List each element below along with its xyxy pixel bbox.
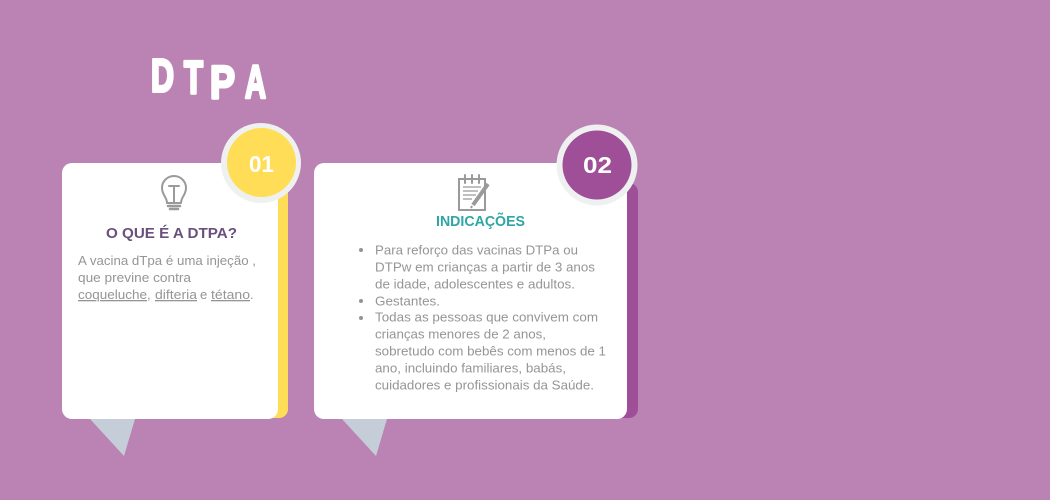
number badge 02	[556, 124, 638, 206]
number badge 01	[221, 123, 301, 203]
title: T	[184, 52, 203, 104]
pointer tail 1	[90, 419, 135, 456]
number badge 02: 02	[583, 152, 612, 178]
panel: o que e a dtpa	[62, 123, 301, 456]
text block: description: difteria	[155, 287, 198, 302]
text block: bullet list: Gestantes.	[375, 294, 440, 308]
text block: bullet list: sobretudo com bebês com menos de 1	[375, 344, 606, 358]
title	[151, 50, 266, 108]
pointer tail 2	[342, 419, 387, 456]
card 2	[314, 163, 627, 419]
heading: indicacoes: INDICAÇÕES	[436, 212, 525, 230]
text block: description: tétano	[211, 287, 250, 302]
text block: description: coqueluche	[78, 287, 147, 302]
text block: bullet list: Todas as pessoas que convivem com	[375, 310, 598, 324]
text block: description	[78, 253, 256, 302]
text block: bullet list: DTPw em crianças a partir de 3 anos	[375, 260, 596, 274]
icon: notepad and pencil	[459, 175, 488, 210]
number badge 01: 01	[249, 151, 274, 177]
heading: o que e a dtpa: O QUE É A DTPA?	[106, 225, 237, 242]
title: A	[245, 56, 266, 108]
text block: bullet list	[359, 242, 606, 392]
text block: bullet list: de idade, adolescentes e adultos.	[375, 276, 575, 292]
text block: description: que previne contra	[78, 270, 192, 285]
yellow backing 1	[240, 183, 288, 418]
purple backing 2	[580, 183, 638, 418]
text block: description: e	[200, 287, 207, 302]
text block: description: A vacina dTpa é uma injeção ,	[78, 253, 256, 268]
text block: bullet list: crianças menores de 2 anos,	[375, 326, 546, 342]
text block: description: .	[250, 287, 254, 302]
text block: description: ,	[147, 287, 151, 302]
title: D	[151, 50, 174, 102]
text block: bullet list: cuidadores e profissionais da Saúde.	[375, 378, 594, 392]
text block: bullet list: Para reforço das vacinas DTPa ou	[375, 242, 578, 258]
icon: light bulb	[162, 176, 186, 209]
text block: bullet list: ano, incluindo familiares, babás,	[375, 360, 566, 376]
panel: indicacoes	[314, 124, 638, 456]
card 1	[62, 163, 278, 419]
title: P	[210, 56, 235, 108]
